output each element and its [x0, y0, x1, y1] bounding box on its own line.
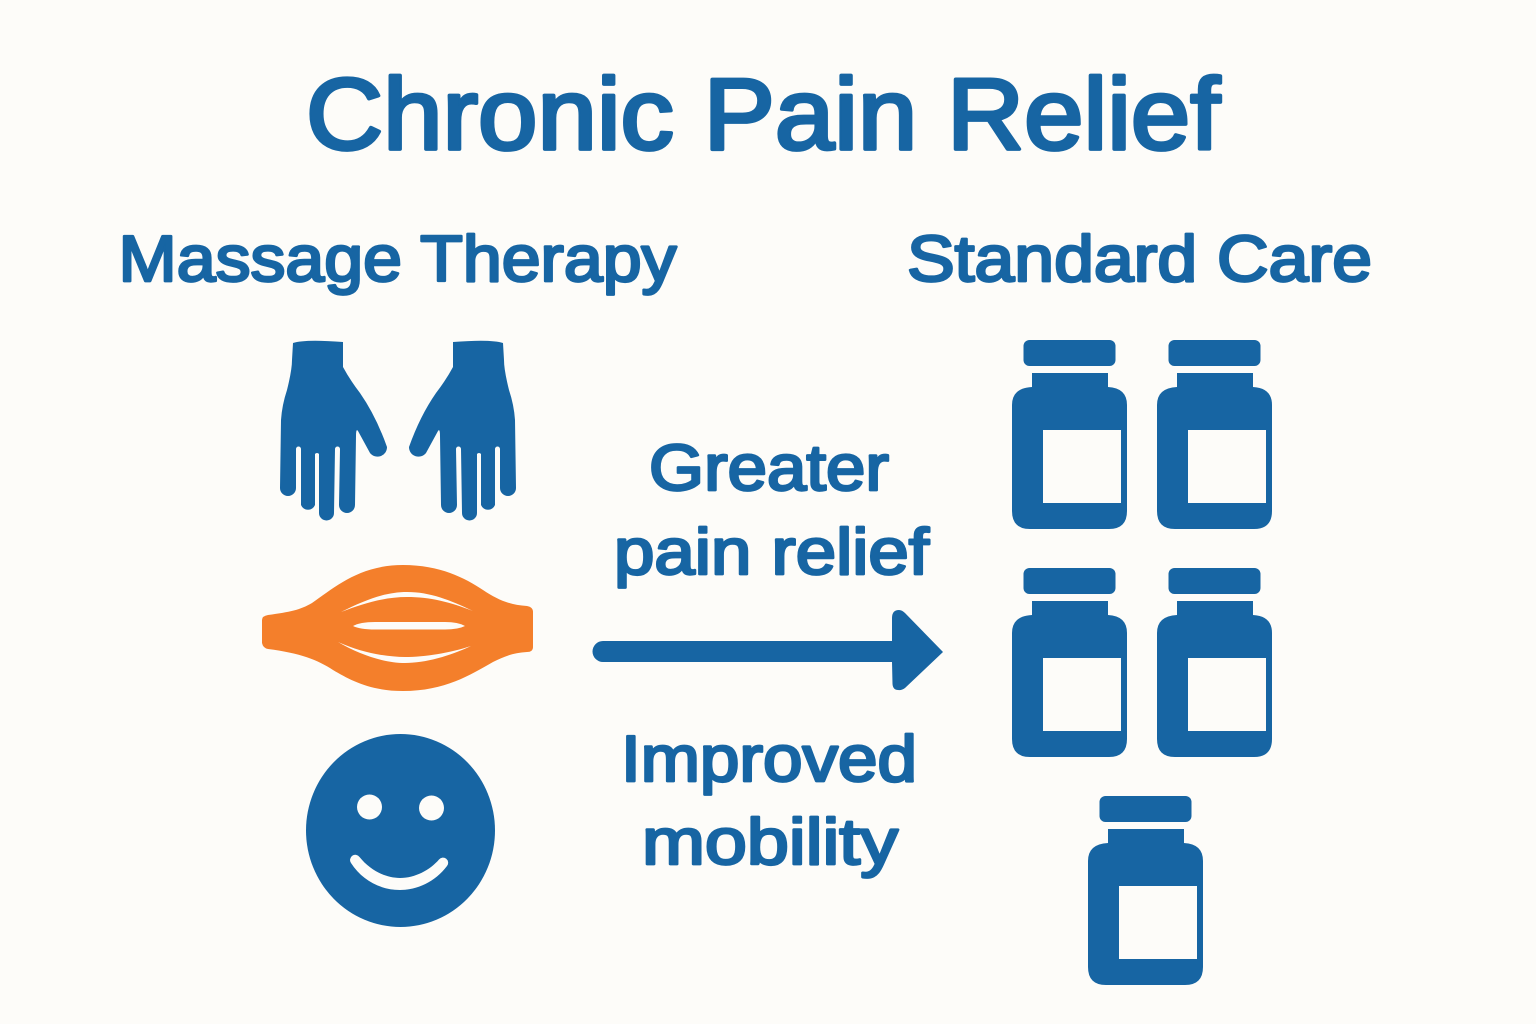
icon: muscle — [262, 565, 533, 691]
label: improved mobility: Improved — [621, 722, 917, 795]
icon: bottle 4 — [1157, 568, 1272, 757]
heading: massage therapy: Massage Therapy — [118, 222, 677, 295]
icon: smiley face — [306, 734, 495, 927]
icon: hands — [280, 341, 516, 520]
arrow — [592, 610, 943, 690]
label: greater pain relief: Greater — [649, 431, 889, 504]
heading: standard care: Standard Care — [907, 222, 1372, 295]
icon: bottle 1 — [1012, 340, 1127, 529]
icon: bottle 2 — [1157, 340, 1272, 529]
label: improved mobility: mobility — [642, 805, 899, 878]
label: improved mobility — [621, 722, 917, 878]
title: Chronic Pain Relief — [306, 59, 1221, 171]
label: greater pain relief — [614, 431, 930, 588]
icon: right hand — [409, 341, 516, 520]
icon: bottle 3 — [1012, 568, 1127, 757]
icon: bottle 5 — [1088, 796, 1203, 985]
icon: left hand — [280, 341, 387, 520]
label: greater pain relief: pain relief — [614, 515, 930, 588]
icon: pill bottles — [1012, 340, 1272, 985]
